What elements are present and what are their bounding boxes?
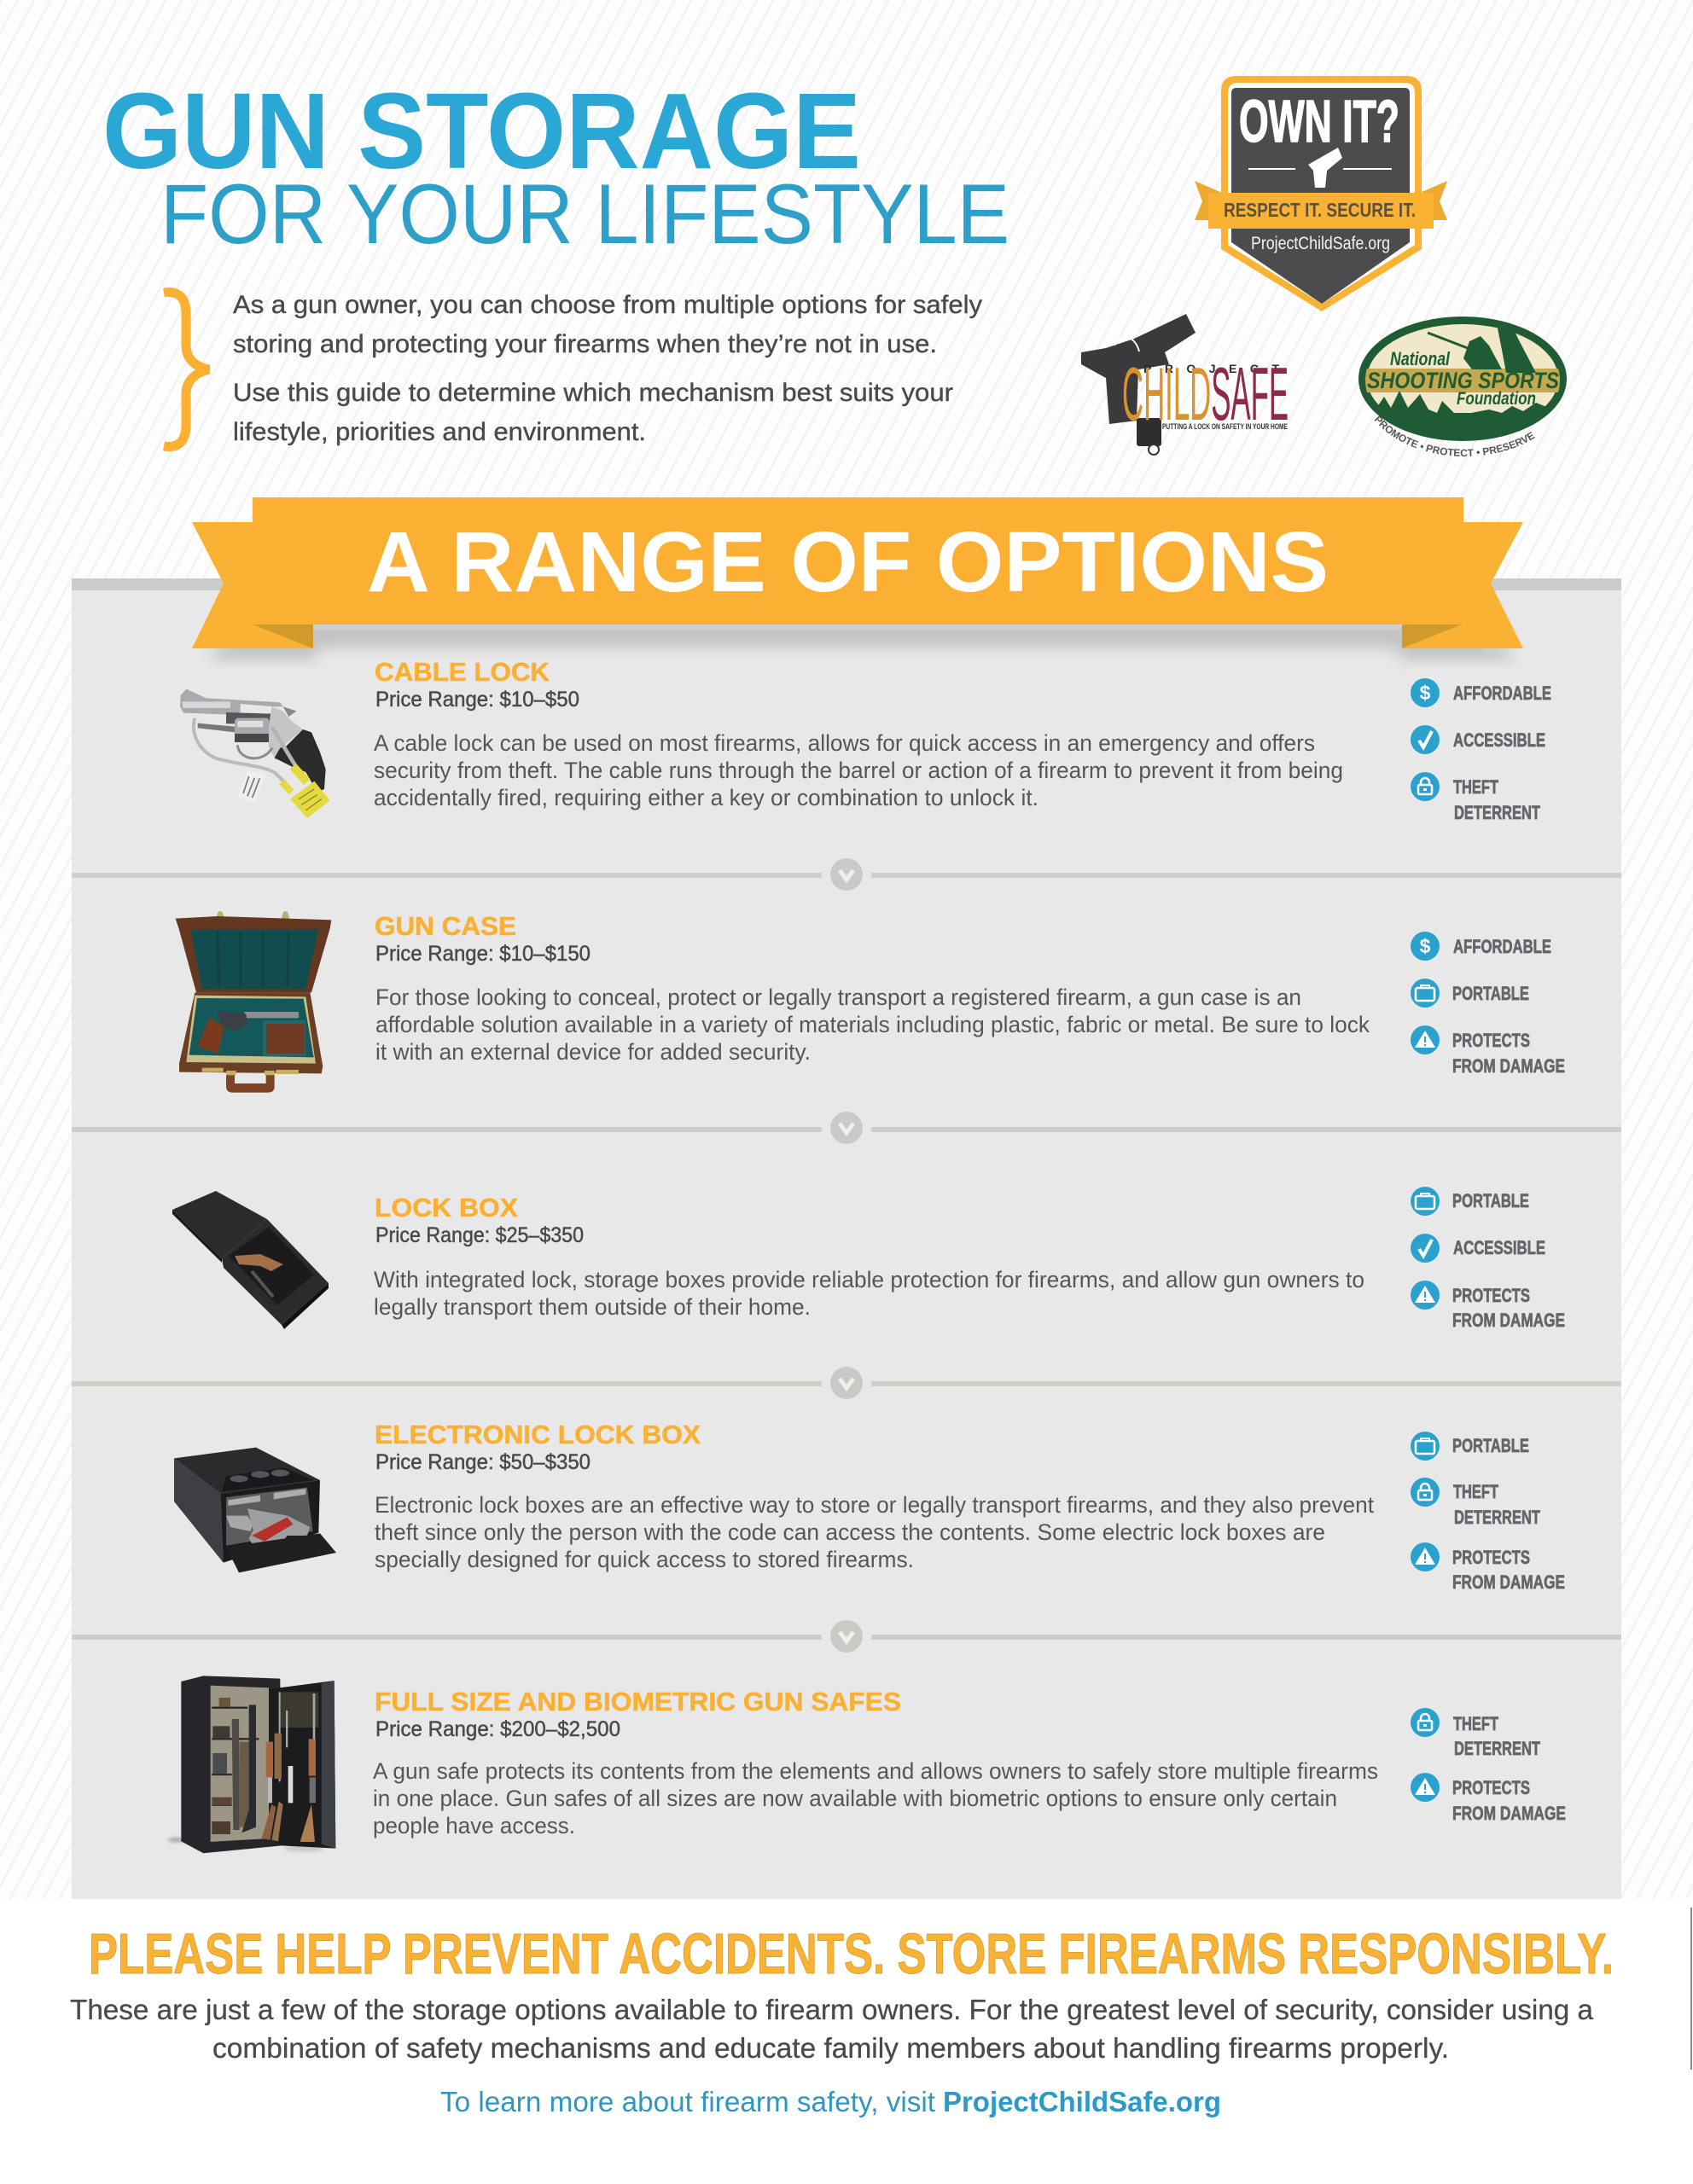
photo: revolver with cable lock <box>180 689 330 818</box>
row: lock box <box>172 1187 1565 1331</box>
icon: pistol <box>1308 148 1342 188</box>
attribute: portable: PORTABLE <box>1452 1190 1529 1211</box>
photo: gun safe <box>168 1676 335 1853</box>
body text: For those looking to conceal, protect or legally transport a registered firearm, a gun case is an <box>375 985 1301 1010</box>
attribute: protects from damage <box>1411 1025 1565 1077</box>
attribute: theft deterrent: DETERRENT <box>1454 1738 1540 1759</box>
row: full size and biometric gun safes <box>168 1676 1566 1853</box>
footer text: These are just a few of the storage options available to firearm owners. For the greatest level of security, consider using a <box>70 1994 1594 2025</box>
body text: A gun safe protects its contents from the elements and allows owners to safely store multiple firearms <box>373 1758 1378 1784</box>
attribute: theft deterrent: THEFT <box>1453 776 1498 798</box>
body text <box>374 1267 1364 1320</box>
logo: National Shooting Sports Foundation: SHOOTING SPORTS <box>1367 368 1559 393</box>
attribute: protects from damage: FROM DAMAGE <box>1452 1571 1565 1593</box>
footer call to action: To learn more about firearm safety, visit <box>440 2086 935 2117</box>
attribute: portable: PORTABLE <box>1452 1435 1529 1456</box>
attribute: theft deterrent: DETERRENT <box>1454 802 1540 823</box>
body text <box>375 1492 1374 1572</box>
divider with chevron <box>72 1367 1621 1399</box>
attribute: protects from damage: PROTECTS <box>1452 1030 1530 1051</box>
attribute: protects from damage <box>1411 1281 1565 1331</box>
intro text: As a gun owner, you can choose from multiple options for safely <box>233 291 982 319</box>
body text: specially designed for quick access to stored firearms. <box>375 1547 914 1572</box>
photo: gun case <box>176 911 331 1093</box>
heading: electronic lock box: ELECTRONIC LOCK BOX <box>375 1420 701 1449</box>
intro text: Use this guide to determine which mechanism best suits your <box>233 379 953 407</box>
divider with chevron <box>72 1112 1621 1144</box>
footer call to action: ProjectChildSafe.org <box>943 2086 1221 2117</box>
logo: Project ChildSafe: CHILDSAFE <box>1122 351 1289 436</box>
photo: lock box <box>172 1191 329 1329</box>
attribute: protects from damage: FROM DAMAGE <box>1452 1803 1566 1824</box>
divider with chevron <box>72 1620 1621 1653</box>
heading: gun case: GUN CASE <box>375 911 516 941</box>
logo: Project ChildSafe: PUTTING A LOCK ON SAFETY IN YOUR HOME <box>1162 422 1288 432</box>
attribute: theft deterrent <box>1411 1708 1540 1759</box>
body text: legally transport them outside of their home. <box>374 1294 811 1320</box>
row: cable lock <box>180 657 1551 823</box>
row: gun case <box>176 911 1565 1093</box>
title: FOR YOUR LIFESTYLE <box>160 166 1009 261</box>
body text <box>375 985 1370 1065</box>
attribute: affordable <box>1411 932 1551 961</box>
price range: Price Range: $200–$2,500 <box>375 1717 620 1741</box>
attribute: theft deterrent: THEFT <box>1453 1481 1498 1502</box>
intro text: lifestyle, priorities and environment. <box>233 418 646 446</box>
footer text <box>70 1994 1594 2064</box>
attribute: portable <box>1411 1432 1529 1461</box>
attribute: accessible: ACCESSIBLE <box>1453 729 1545 751</box>
attribute: protects from damage: FROM DAMAGE <box>1452 1055 1565 1077</box>
logo: Project ChildSafe: PROJECT <box>1143 362 1279 375</box>
attribute: theft deterrent <box>1411 772 1540 823</box>
logo: Project ChildSafe <box>1081 314 1289 455</box>
attribute: accessible: ACCESSIBLE <box>1453 1237 1545 1258</box>
row: electronic lock box <box>174 1420 1565 1593</box>
body text: accidentally fired, requiring either a key or combination to unlock it. <box>374 785 1038 810</box>
intro text <box>233 291 982 446</box>
attribute: protects from damage <box>1411 1542 1565 1593</box>
body text: in one place. Gun safes of all sizes are now available with biometric options to ensure only certain <box>373 1786 1337 1811</box>
photo: electronic lock box <box>174 1448 336 1572</box>
attribute: theft deterrent <box>1411 1478 1540 1528</box>
panel: options background <box>72 578 1621 1899</box>
attribute: portable <box>1411 1187 1529 1216</box>
body text: security from theft. The cable runs through the barrel or action of a firearm to prevent it from being <box>374 758 1343 783</box>
body text: it with an external device for added security. <box>375 1039 811 1065</box>
logo: National Shooting Sports Foundation: National <box>1390 348 1451 369</box>
body text <box>374 730 1343 810</box>
attribute: accessible <box>1411 1234 1545 1263</box>
icon: orange brace <box>164 292 209 447</box>
logo: National Shooting Sports Foundation: PROMOTE • PROTECT • PRESERVE <box>1374 415 1535 457</box>
price range: Price Range: $10–$150 <box>375 942 591 966</box>
logo: National Shooting Sports Foundation: Foundation <box>1457 389 1536 409</box>
banner: A Range of Options <box>192 497 1523 659</box>
body text: theft since only the person with the code can access the contents. Some electric lock boxes are <box>375 1519 1325 1545</box>
logo: Own It shield: ProjectChildSafe.org <box>1251 234 1390 253</box>
heading: lock box: LOCK BOX <box>375 1193 518 1223</box>
title <box>102 71 1009 261</box>
attribute: affordable <box>1411 678 1551 707</box>
heading: full size and biometric gun safes: FULL SIZE AND BIOMETRIC GUN SAFES <box>375 1687 901 1716</box>
attribute: portable: PORTABLE <box>1452 983 1529 1004</box>
attribute: affordable: $ <box>1420 935 1431 957</box>
price range: Price Range: $25–$350 <box>375 1223 584 1247</box>
logo: Own It shield <box>1195 76 1447 311</box>
banner: A Range of Options: A RANGE OF OPTIONS <box>367 514 1329 610</box>
attribute: portable <box>1411 979 1529 1008</box>
body text: Electronic lock boxes are an effective way to store or legally transport firearms, and they also prevent <box>375 1492 1374 1518</box>
logo: Own It shield: OWN IT? <box>1239 88 1399 154</box>
attribute: theft deterrent: DETERRENT <box>1454 1507 1540 1528</box>
logo: Own It shield: RESPECT IT. SECURE IT. <box>1224 199 1416 221</box>
logo: National Shooting Sports Foundation <box>1358 317 1567 457</box>
body text: people have access. <box>373 1813 575 1838</box>
heading: cable lock: CABLE LOCK <box>375 657 550 687</box>
footer text: combination of safety mechanisms and educate family members about handling firearms properly. <box>212 2032 1449 2064</box>
body text <box>373 1758 1378 1838</box>
footer call to action <box>440 2086 1221 2117</box>
price range: Price Range: $10–$50 <box>375 688 579 712</box>
attribute: affordable: AFFORDABLE <box>1453 682 1551 704</box>
attribute: affordable: AFFORDABLE <box>1453 936 1551 957</box>
body text: A cable lock can be used on most firearms, allows for quick access in an emergency and offers <box>374 730 1315 756</box>
attribute: protects from damage: PROTECTS <box>1452 1777 1530 1798</box>
attribute: affordable: $ <box>1420 682 1431 704</box>
body text: affordable solution available in a variety of materials including plastic, fabric or metal. Be sure to lock <box>375 1012 1370 1037</box>
attribute: protects from damage <box>1411 1773 1566 1824</box>
body text: With integrated lock, storage boxes provide reliable protection for firearms, and allow gun owners to <box>374 1267 1364 1292</box>
title: GUN STORAGE <box>102 71 861 191</box>
intro text: storing and protecting your firearms when they’re not in use. <box>233 330 937 358</box>
attribute: protects from damage: PROTECTS <box>1452 1547 1530 1568</box>
price range: Price Range: $50–$350 <box>375 1450 591 1474</box>
attribute: protects from damage: FROM DAMAGE <box>1452 1310 1565 1331</box>
attribute: accessible <box>1411 725 1545 754</box>
attribute: theft deterrent: THEFT <box>1453 1713 1498 1734</box>
divider with chevron <box>72 858 1621 891</box>
attribute: protects from damage: PROTECTS <box>1452 1285 1530 1306</box>
